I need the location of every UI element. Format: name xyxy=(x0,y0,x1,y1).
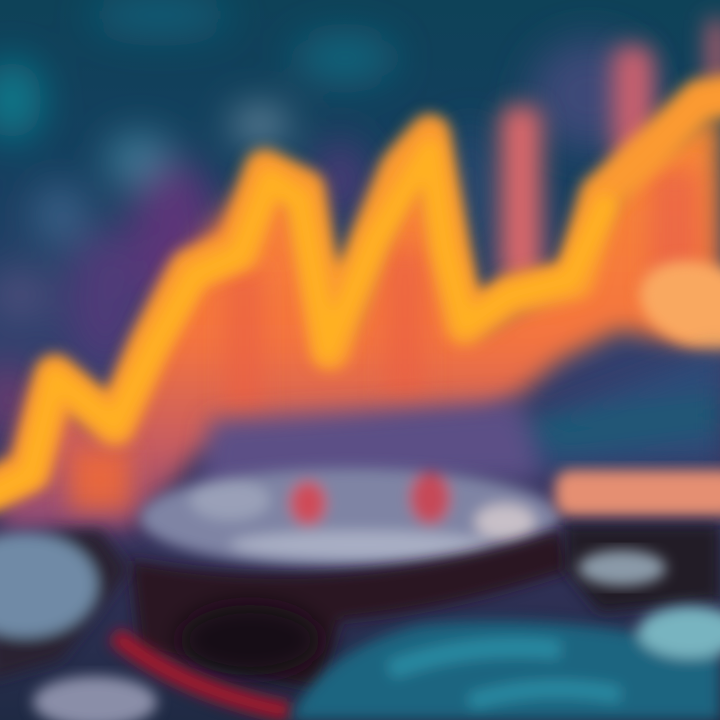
right stack orange top xyxy=(555,470,720,516)
bottom teal coin xyxy=(290,606,720,720)
background glows xyxy=(0,0,650,435)
distant pink bars xyxy=(500,20,720,285)
orange area under chart line xyxy=(0,110,720,530)
bottom left coin xyxy=(33,676,157,720)
darker vertical streaks in area xyxy=(70,170,700,510)
right stack oval xyxy=(578,550,666,586)
dark centre of base xyxy=(180,605,320,675)
red coin edge xyxy=(115,635,290,712)
main coin dark base xyxy=(130,530,570,690)
lower right haze xyxy=(200,350,720,490)
left coin xyxy=(0,530,130,680)
main coin top xyxy=(140,468,560,568)
chart line glow: yellow orange xyxy=(0,95,720,495)
right orange coin xyxy=(628,246,720,364)
right stack dark body xyxy=(565,525,720,612)
